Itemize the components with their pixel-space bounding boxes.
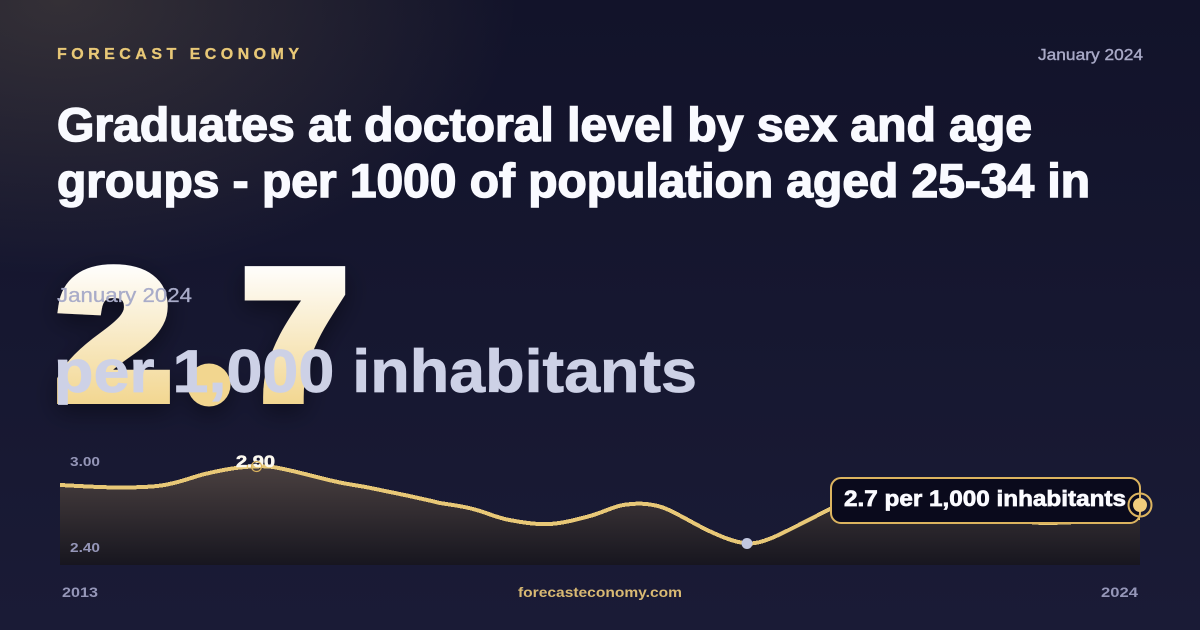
axis label 2.40: 2.40: [70, 540, 100, 555]
title: groups - per 1000 of population aged 25-34 in: [57, 154, 1090, 207]
callout: [831, 478, 1140, 523]
peak marker: [252, 462, 262, 472]
title: [57, 98, 1090, 207]
big value 2.7: 2: [58, 235, 170, 436]
big value 2.7: 7: [244, 234, 346, 436]
big value 2.7: [58, 234, 346, 436]
line chart: [60, 452, 1152, 565]
axis label 3.00: 3.00: [70, 454, 100, 469]
trend line: [60, 466, 1140, 544]
current value marker: [1128, 494, 1152, 516]
low marker: [742, 538, 752, 549]
callout: 2.7 per 1,000 inhabitants: [844, 486, 1126, 511]
peak value label: 2.90: [236, 452, 275, 471]
date under title: January 2024: [57, 285, 192, 307]
brand label: FORECAST ECONOMY: [57, 46, 299, 63]
source website: forecasteconomy.com: [518, 584, 682, 600]
unit text: per 1,000 inhabitants: [54, 338, 697, 405]
end year: 2024: [1101, 584, 1138, 600]
date top right: January 2024: [1038, 47, 1143, 64]
chart area: [60, 466, 1140, 565]
title: Graduates at doctoral level by sex and age: [57, 98, 1032, 151]
start year: 2013: [62, 584, 98, 600]
